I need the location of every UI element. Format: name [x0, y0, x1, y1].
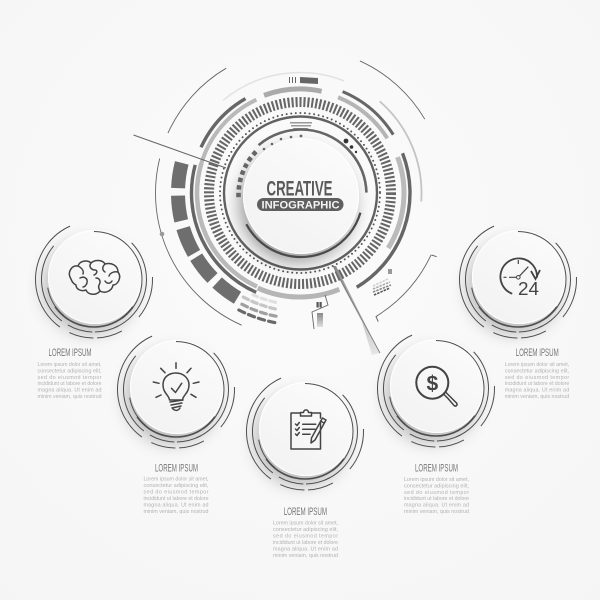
body text: magna aliqua. Ut enim ad [404, 503, 469, 509]
body text [144, 477, 209, 515]
body text: minim veniam, quis nostrud [273, 553, 338, 559]
right bracket ends [376, 255, 437, 322]
pointer wedge [333, 266, 380, 355]
body text: Lorem ipsum dolor sit amet, [38, 362, 102, 368]
segmented left blocks [127, 20, 473, 366]
body text: minim veniam, quis nostrud [404, 509, 469, 515]
top small grid [290, 122, 312, 130]
body text: consectetur adipiscing elit, [505, 368, 570, 374]
hub disc [244, 138, 358, 254]
item: brain [12, 198, 176, 400]
band arcs [155, 48, 445, 338]
body text: sed do eiusmod tempor [144, 490, 209, 496]
body text: sed do eiusmod tempor [404, 490, 469, 496]
icon: magnifier with dollar: $ [426, 372, 438, 396]
hub dots [263, 135, 302, 150]
disc [472, 230, 566, 324]
item: magnifier [354, 307, 518, 515]
rings [436, 198, 600, 361]
label: LOREM IPSUM [48, 347, 92, 359]
central technology dial [107, 0, 493, 386]
pill: INFOGRAPHIC: INFOGRAPHIC [262, 199, 340, 211]
body text [38, 362, 102, 400]
inner dark ring [224, 116, 377, 270]
disc [48, 230, 142, 324]
small right grid [373, 269, 392, 295]
small technical bracket [312, 295, 328, 329]
body text: incididunt ut labore et dolore [273, 540, 338, 546]
body text: incididunt ut labore et dolore [144, 496, 208, 502]
body text: sed do eiusmod tempor [38, 375, 102, 381]
body text: incididunt ut labore et dolore [38, 381, 102, 387]
item: clipboard [223, 350, 387, 559]
tick ring [209, 102, 391, 284]
icon: magnifier with dollar [416, 367, 457, 406]
lower mini grid [145, 38, 455, 348]
body text: Lorem ipsum dolor sit amet, [505, 362, 570, 368]
label: LOREM IPSUM [516, 347, 559, 359]
item: light bulb [94, 308, 258, 515]
body text: magna aliqua. Ut enim ad [273, 546, 338, 552]
icon: brain [69, 260, 120, 294]
rings [94, 308, 258, 471]
body text: consectetur adipiscing elit, [404, 483, 470, 489]
rings [223, 350, 387, 513]
central hub [209, 103, 393, 287]
body text: incididunt ut labore et dolore [505, 381, 569, 387]
hub accent arcs [209, 103, 393, 287]
disc [260, 382, 352, 476]
dot ring [220, 113, 380, 273]
top marker block [289, 77, 318, 84]
icon: clock 24 [500, 258, 540, 299]
item: 24 hour clock [436, 198, 600, 400]
label: LOREM IPSUM [284, 506, 327, 518]
title: CREATIVE: CREATIVE [266, 178, 332, 200]
light outer arcs [129, 22, 471, 364]
marker dot [160, 232, 164, 236]
disc [390, 340, 484, 432]
body text: consectetur adipiscing elit, [144, 483, 209, 489]
body text: Lorem ipsum dolor sit amet, [404, 477, 469, 483]
body text: minim veniam, quis nostrud [144, 509, 208, 515]
body text: consectetur adipiscing elit, [38, 368, 102, 374]
icon: clock 24: 24 [518, 278, 539, 299]
body text: magna aliqua. Ut enim ad [144, 502, 208, 508]
label: LOREM IPSUM [415, 463, 458, 475]
disc [130, 340, 224, 434]
body text: sed do eiusmod tempor [505, 375, 569, 381]
body text: magna aliqua. Ut enim ad [38, 388, 102, 394]
body text [404, 477, 470, 515]
body text: Lorem ipsum dolor sit amet, [273, 521, 338, 527]
label: LOREM IPSUM [155, 463, 198, 475]
icon: light bulb [153, 363, 199, 410]
icon: clipboard [291, 410, 326, 449]
long pointer line [134, 135, 226, 168]
body text [505, 362, 570, 400]
body text: sed do eiusmod tempor [273, 534, 338, 540]
rings [354, 307, 518, 470]
body text: Lorem ipsum dolor sit amet, [144, 477, 209, 483]
body text: minim veniam, quis nostrud [505, 394, 569, 400]
body text: consectetur adipiscing elit, [273, 527, 339, 533]
body text [273, 521, 339, 559]
body text: minim veniam, quis nostrud [38, 394, 102, 400]
outer thin arcs [107, 0, 493, 386]
body text: incididunt ut labore et dolore [404, 496, 469, 502]
rings [12, 198, 176, 361]
body text: magna aliqua. Ut enim ad [505, 388, 569, 394]
